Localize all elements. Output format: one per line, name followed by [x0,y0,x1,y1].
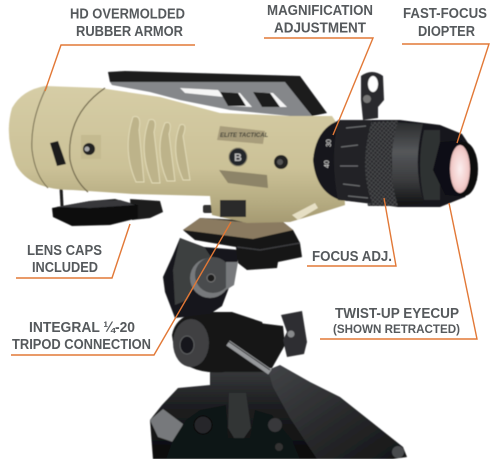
label: twist-up eyecup [333,306,460,336]
label: twist-up eyecup: TWIST-UP EYECUP [335,306,459,322]
cap tether clip [50,141,66,166]
leader: rubber armor [45,45,195,91]
ribbed ring [334,120,372,203]
label: rubber armor: RUBBER ARMOR [76,24,183,40]
label: magnification adjustment [267,3,373,36]
label: fast-focus diopter [403,6,487,40]
label: tripod connection [12,320,151,353]
serial label [220,200,246,217]
sight clamp [361,72,384,120]
label: lens caps included [27,243,102,276]
lower front slot [292,203,318,220]
label: fast-focus diopter: DIOPTER [418,24,475,40]
eyepiece assembly [313,120,478,207]
leader: tripod connection [11,222,231,355]
leader lines [11,38,489,355]
leader: focus adjustment [307,198,396,266]
grip ribs [128,117,190,183]
tripod head: lower ball joint [172,312,272,372]
scope tan body [9,86,345,223]
label: twist-up eyecup: (SHOWN RETRACTED) [333,322,460,336]
bushnell logo [229,148,247,166]
lens cap [52,168,163,226]
label: fast-focus diopter: FAST-FOCUS [403,6,487,22]
label: lens caps included: LENS CAPS [27,243,102,259]
leader: lens caps [16,224,130,278]
eyepiece assembly: 40 [324,160,331,168]
leader: magnification [264,38,373,135]
label: lens caps included: INCLUDED [32,260,98,276]
knurled focus ring [363,121,398,206]
eyecup housing [420,130,440,200]
eyepiece silhouette [313,120,477,207]
tripod base [150,366,320,459]
scope tan body: B [234,152,242,164]
eyecup [433,140,477,197]
tripod tilt knob [245,311,307,372]
handle rod [228,341,270,372]
scope tan body: ELITE TACTICAL [220,133,269,139]
product photo: scope on tripod [9,71,478,459]
smooth barrel [392,122,424,206]
tripod head: bracket [163,238,240,318]
label: rubber armor: HD OVERMOLDED [70,6,185,22]
lens [450,142,478,196]
label: tripod connection: INTEGRAL ¼-20 [29,320,135,336]
scope rail [108,71,327,116]
label: rubber armor [70,6,185,40]
eyepiece assembly: 30 [326,139,333,147]
rear bolt [81,135,101,159]
front bolt [274,155,288,169]
label: magnification adjustment: MAGNIFICATION [267,3,373,19]
label: focus adjustment: FOCUS ADJ. [312,249,392,265]
quick release plate [183,218,302,270]
leader: eyecup [320,203,477,339]
tripod pan handle [268,365,407,459]
label: tripod connection: TRIPOD CONNECTION [12,337,151,353]
label: magnification adjustment: ADJUSTMENT [274,20,366,36]
elite tactical badge [217,126,265,144]
mount pads under body [203,205,214,213]
leader: diopter [402,44,489,143]
